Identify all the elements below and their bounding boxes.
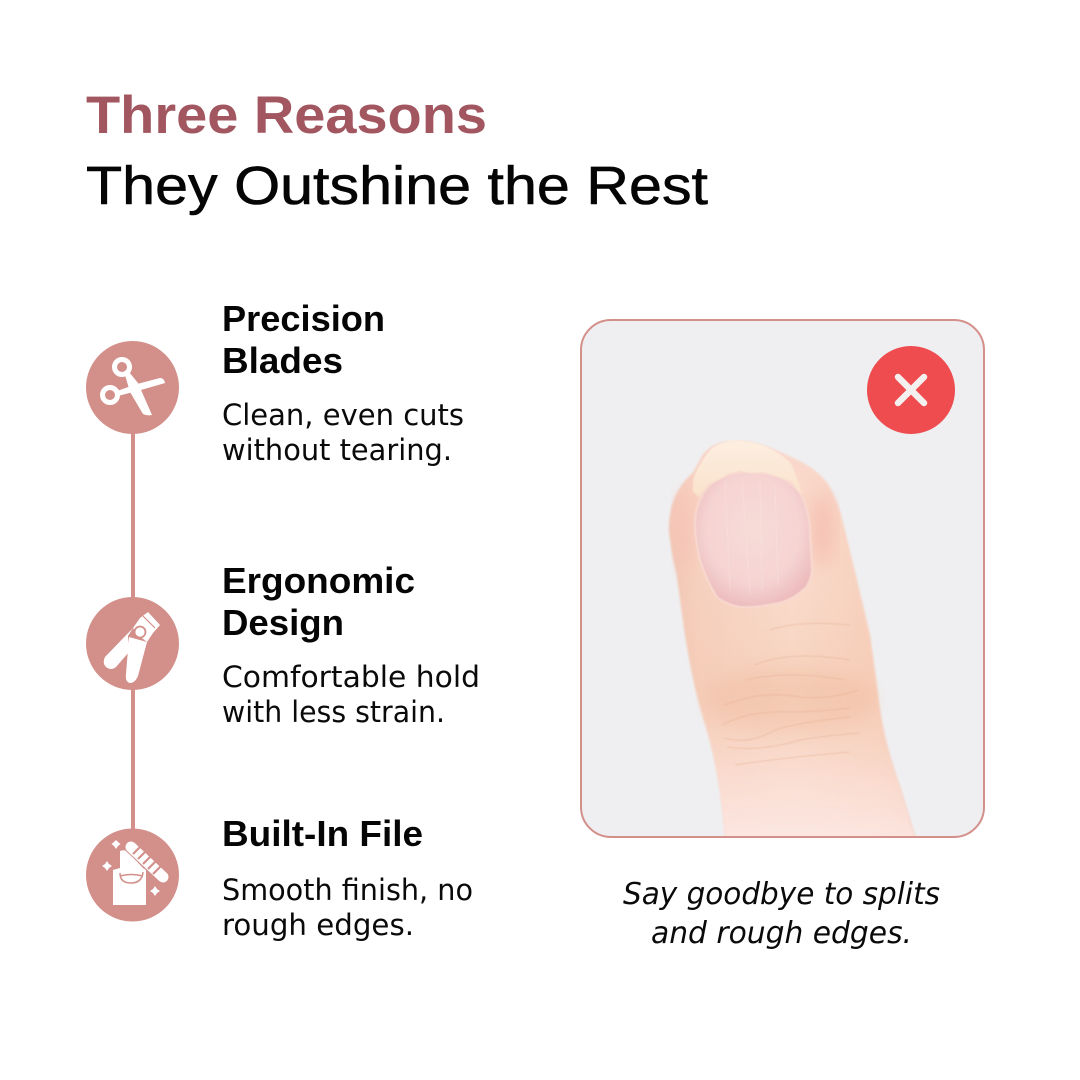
text block: Ergonomic Design: with less strain. [222,695,445,729]
panel border [581,320,984,837]
text block: Built-In File: Built-In File [222,813,423,854]
caption: Say goodbye to splits [623,877,940,912]
knuckle shading [714,669,865,732]
text block: Ergonomic Design [222,560,480,729]
title [86,86,708,216]
icon: scissors [86,341,179,434]
caption [623,877,940,951]
text block: Built-In File [222,813,473,942]
text block: Precision Blades [222,298,464,467]
text block: Precision Blades: Clean, even cuts [222,398,464,432]
nail ridges [730,582,778,595]
text block: Built-In File: rough edges. [222,908,414,942]
timeline connector [131,425,135,845]
text block: Precision Blades: without tearing. [222,433,452,467]
title: They Outshine the Rest [86,156,708,216]
rough free edge [693,440,802,497]
icon: nail file and finger [86,828,179,922]
icon: nail clipper [86,597,179,690]
text block: Precision Blades: Blades [222,340,343,381]
nail plate [695,472,812,607]
illustration: finger with rough nail [669,440,916,840]
knuckle wrinkles [722,623,860,765]
text block: Precision Blades: Precision [222,298,385,339]
text block: Ergonomic Design: Ergonomic [222,560,415,601]
caption: and rough edges. [651,916,912,951]
text block: Ergonomic Design: Comfortable hold [222,660,480,694]
text block: Built-In File: Smooth finish, no [222,873,473,907]
panel: finger photo [581,320,984,840]
text block: Ergonomic Design: Design [222,602,344,643]
title: Three Reasons [86,86,487,145]
icon: red cross badge [867,346,955,434]
cuticle redness [812,494,832,566]
